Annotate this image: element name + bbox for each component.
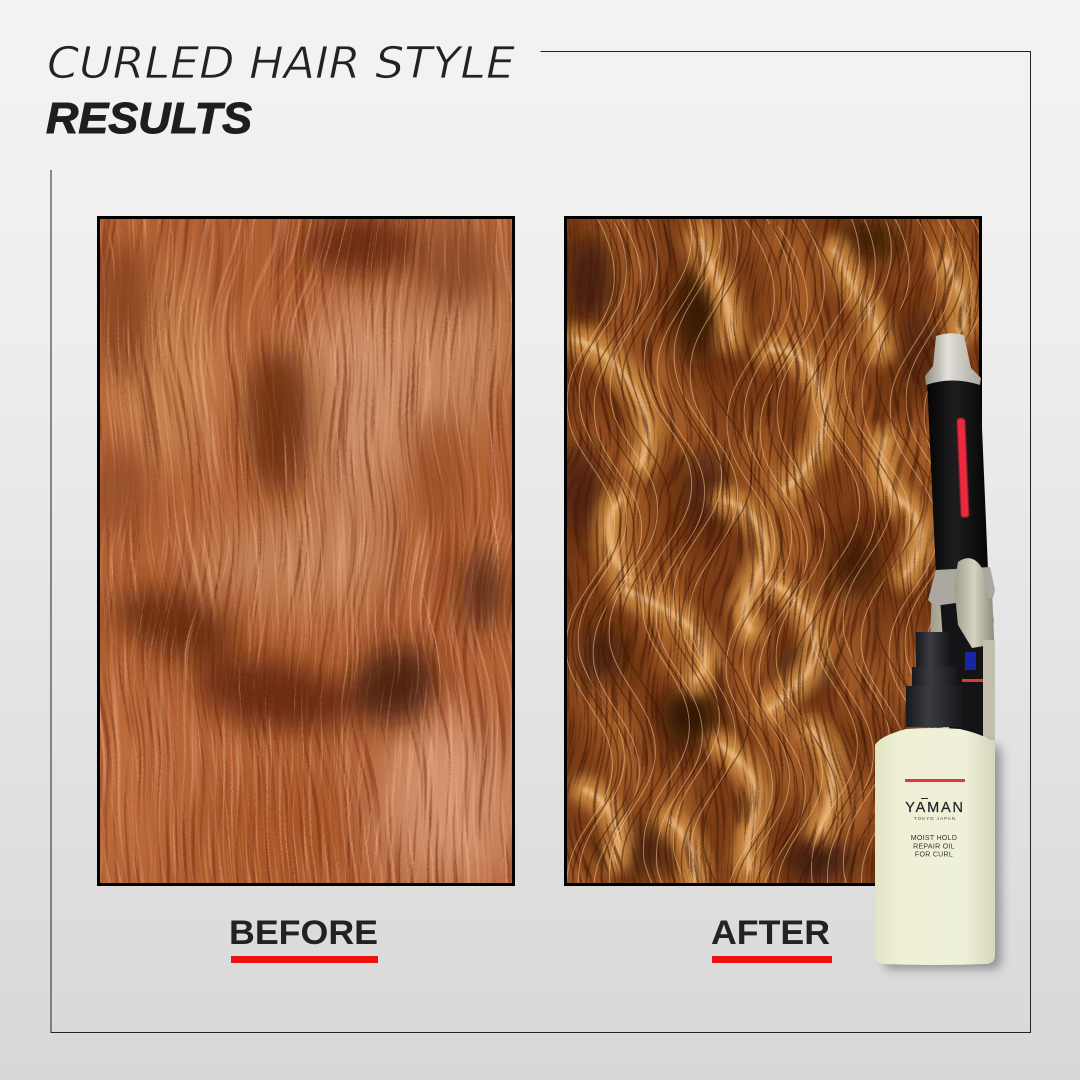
bottle brand: YAMAN — [905, 800, 965, 816]
iron collar — [928, 567, 995, 606]
pump neck — [912, 667, 957, 687]
title — [46, 38, 515, 143]
bottle product name: REPAIR OIL — [913, 844, 955, 850]
pump collar — [906, 686, 962, 727]
bottle sub-brand: TOKYO JAPAN — [914, 816, 956, 821]
bottle logo macron — [921, 798, 928, 799]
iron black barrel — [927, 380, 988, 575]
product: repair oil bottle — [875, 632, 1001, 969]
label: before: BEFORE — [229, 914, 378, 952]
iron handle base — [930, 590, 995, 740]
iron right side — [983, 640, 995, 740]
bottle red line — [905, 779, 965, 782]
title line: results: RESULTS — [46, 94, 252, 143]
panel: before photo — [20, 140, 590, 960]
iron digits — [965, 652, 976, 670]
wavy curled hair texture — [567, 219, 979, 883]
iron cap — [925, 333, 981, 385]
bottle product name: FOR CURL — [915, 852, 953, 858]
bottle body — [875, 728, 995, 965]
bottle shadow — [884, 745, 1001, 969]
red underline before — [231, 956, 378, 963]
iron black inner — [940, 598, 986, 740]
straight frizzy hair texture — [20, 140, 590, 960]
pump top — [916, 632, 950, 668]
bottle product name: MOIST HOLD — [911, 835, 957, 842]
product: curling iron — [925, 333, 995, 740]
red underline after — [712, 956, 832, 963]
iron trigger — [954, 558, 994, 648]
panel: after photo — [564, 216, 982, 886]
title line: curled hair style: CURLED HAIR STYLE — [47, 38, 515, 89]
iron red line — [962, 679, 983, 682]
iron red light — [957, 418, 969, 518]
label: after: AFTER — [711, 914, 830, 952]
